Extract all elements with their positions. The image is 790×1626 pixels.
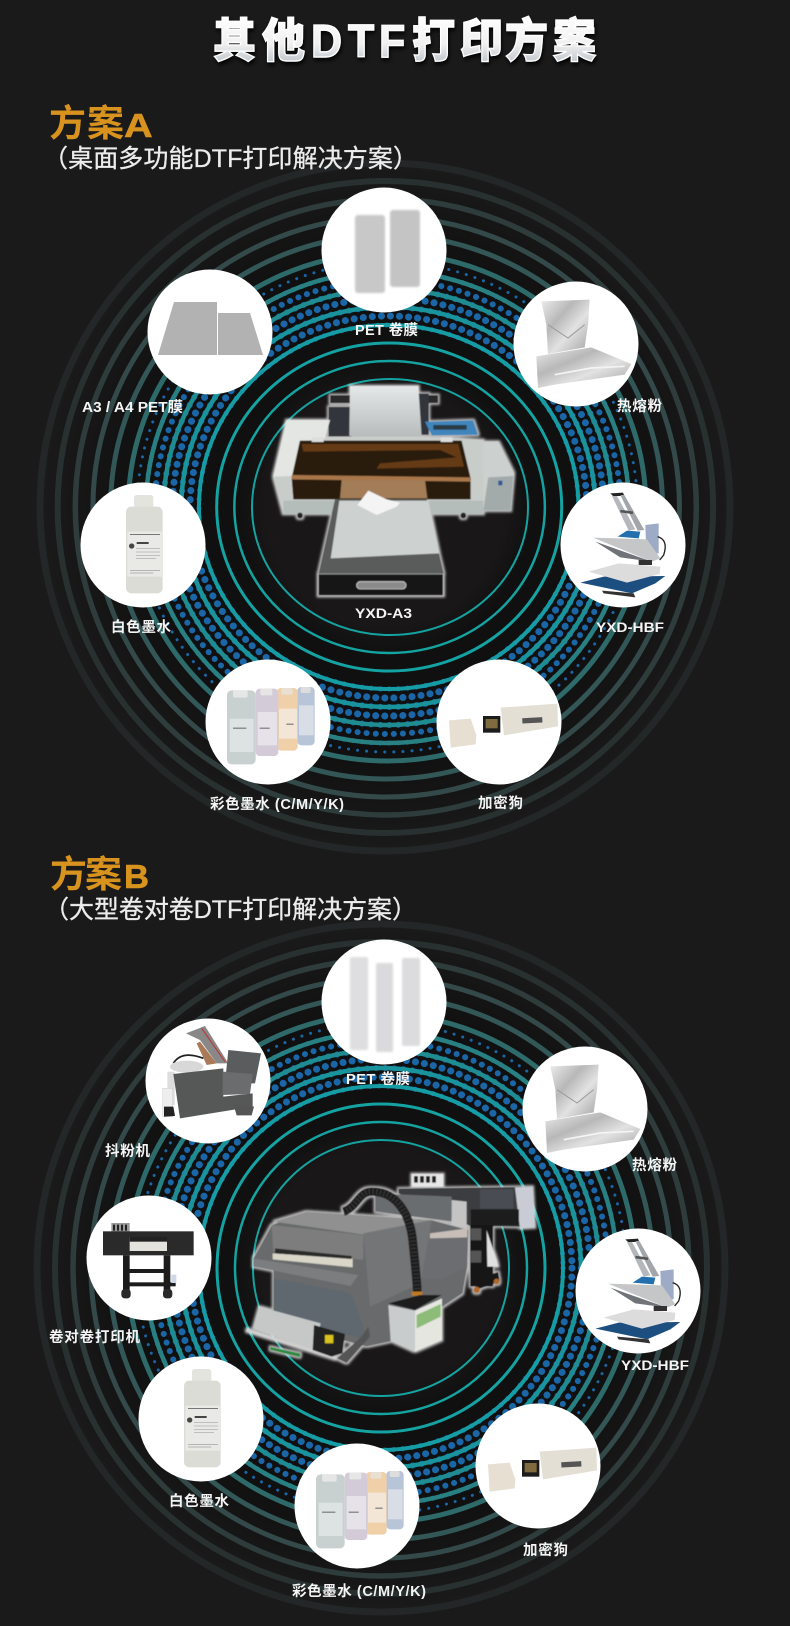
label: A3/A4 PET: A3 / A4 PET膜 [82, 398, 184, 416]
item: A3/A4 PET sheets [148, 270, 272, 394]
heading: plan B: B [124, 859, 149, 896]
item: PET roll film B [322, 940, 446, 1064]
label: powder shaker: 抖粉机 [105, 1142, 150, 1160]
item: colour ink B [294, 1444, 420, 1568]
item: powder shaker [146, 1018, 270, 1144]
item: hot-melt powder B [522, 1046, 648, 1172]
label: colour ink A: 彩色墨水 (C/M/Y/K) [210, 795, 344, 813]
heading: plan A: 方案 [49, 103, 124, 144]
label: YXD-HBF A: YXD-HBF [596, 619, 664, 635]
label: PET film B: PET 卷膜 [346, 1070, 410, 1088]
ring background B [30, 917, 732, 1619]
item: heat press A [560, 482, 686, 608]
subtitle: plan A: （桌面多功能DTF打印解决方案） [43, 145, 418, 173]
label: white ink A: 白色墨水 [111, 618, 172, 636]
printer YXD-A3 [273, 386, 514, 596]
label: dongle A: 加密狗 [478, 794, 523, 812]
label: dongle B: 加密狗 [523, 1541, 568, 1559]
label: YXD-A3: YXD-A3 [355, 605, 412, 621]
label: roll-to-roll printer: 卷对卷打印机 [49, 1328, 140, 1346]
item: encryption dongle B [476, 1404, 600, 1528]
item: colour ink A [206, 660, 330, 784]
label: colour ink B: 彩色墨水 (C/M/Y/K) [292, 1582, 426, 1600]
panel: plan A ring diagram [33, 156, 737, 858]
heading: plan B: 方案 [50, 854, 122, 895]
heading: plan A: A [124, 107, 153, 144]
item: heat press B [576, 1228, 700, 1354]
label: PET film A: PET 卷膜 [355, 321, 418, 339]
title: 其他DTF打印方案 [213, 15, 596, 67]
halftone dots A [137, 262, 637, 752]
subtitle: plan B: （大型卷对卷DTF打印解决方案） [44, 896, 417, 924]
label: YXD-HBF B: YXD-HBF [621, 1357, 689, 1373]
item: hot-melt powder A [514, 282, 638, 406]
label: white ink B: 白色墨水 [169, 1492, 230, 1510]
item: encryption dongle A [436, 660, 562, 784]
label: powder B: 热熔粉 [632, 1156, 678, 1174]
solid underlay for the shaker body [253, 1212, 468, 1347]
item: white ink B [138, 1356, 264, 1482]
concentric rings B [37, 924, 725, 1612]
item: roll-to-roll printer [86, 1196, 212, 1320]
label: powder A: 热熔粉 [617, 397, 662, 415]
item: white ink A [80, 482, 206, 608]
concentric rings A [40, 163, 730, 851]
panel: plan B ring diagram [30, 917, 732, 1619]
printer and powder shaker set [247, 1174, 535, 1363]
ring background A [33, 156, 737, 858]
halftone dots B [136, 1023, 626, 1513]
item: PET roll film A [322, 188, 446, 312]
